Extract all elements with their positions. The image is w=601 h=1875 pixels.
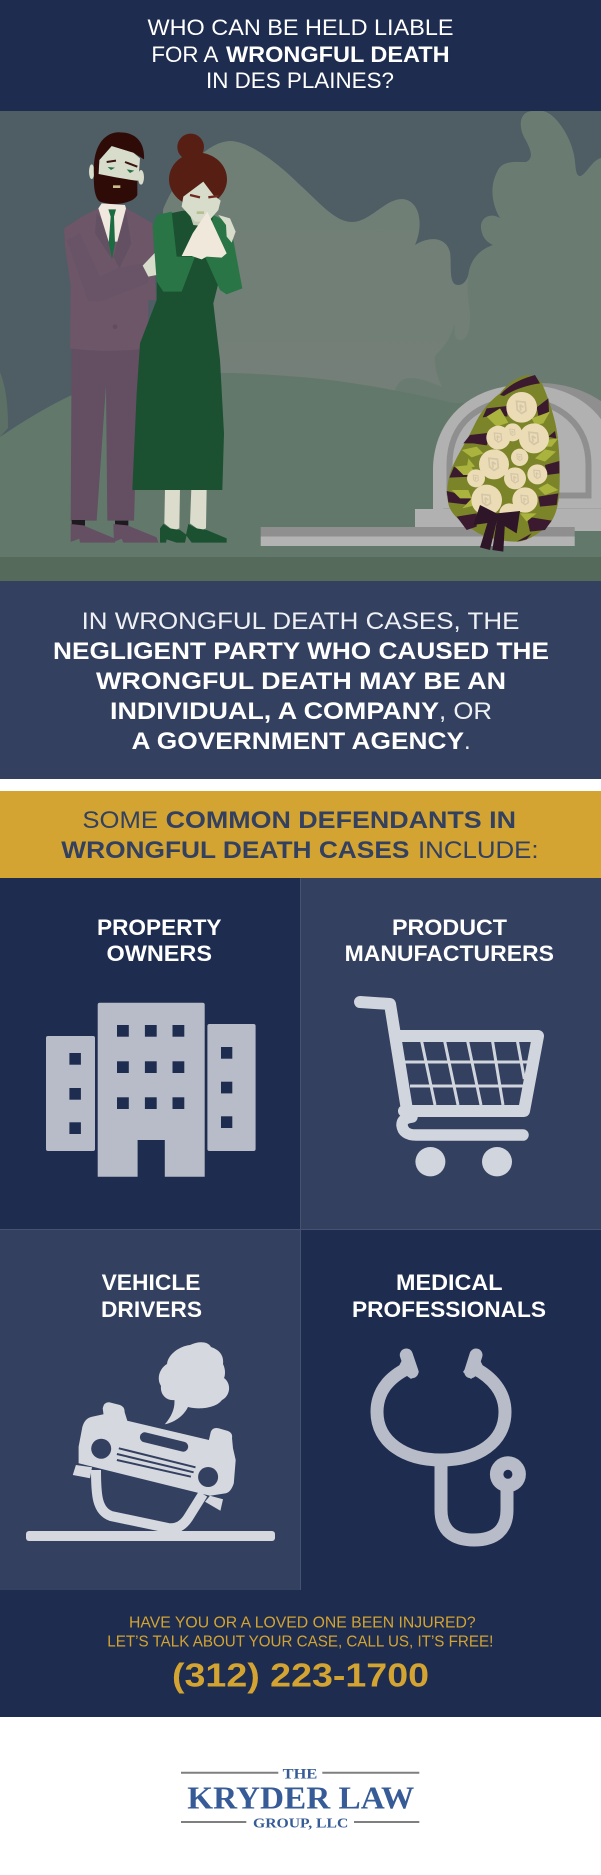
heading: property owners: PROPERTY [97, 915, 222, 940]
call to action footer [0, 1590, 601, 1717]
small bush at left [0, 372, 8, 437]
smoke puff [159, 1342, 229, 1424]
gold heading band [0, 791, 601, 878]
intro statement panel [0, 581, 601, 779]
panel: vehicle drivers [0, 1229, 300, 1590]
intro statement panel: NEGLIGENT PARTY WHO CAUSED THE [53, 638, 549, 665]
heading: medical professionals: PROFESSIONALS [352, 1297, 546, 1322]
wreath leaves [452, 408, 558, 522]
cell dividers [0, 878, 601, 1590]
intro statement panel: , OR [439, 698, 492, 725]
funeral wreath [447, 375, 560, 552]
gold heading band: COMMON DEFENDANTS IN [166, 807, 516, 834]
heading: medical professionals: MEDICAL [396, 1270, 502, 1295]
icon: stethoscope [377, 1352, 526, 1540]
heading: medical professionals [352, 1270, 546, 1322]
woman in green dress [132, 134, 242, 543]
panel: medical professionals [300, 1229, 601, 1590]
call to action footer: LET’S TALK ABOUT YOUR CASE, CALL US, IT’S FREE! [107, 1634, 493, 1651]
logo: The Kryder Law Group, LLC: THE [283, 1767, 317, 1783]
heading: vehicle drivers: DRIVERS [101, 1297, 202, 1322]
left tree [163, 141, 480, 420]
wreath ribbon bands [447, 375, 559, 542]
wreath bow [473, 505, 520, 552]
panel: property owners [0, 878, 300, 1229]
gold heading band: SOME [82, 807, 158, 834]
title banner: WRONGFUL DEATH [226, 42, 450, 67]
intro statement panel: . [464, 728, 471, 755]
intro statement panel: INDIVIDUAL, A COMPANY [110, 698, 439, 725]
heading: product manufacturers [345, 915, 554, 966]
heading: property owners: OWNERS [106, 941, 212, 966]
heading: product manufacturers: MANUFACTURERS [345, 941, 554, 966]
logo: The Kryder Law Group, LLC: KRYDER LAW [187, 1779, 414, 1815]
logo: The Kryder Law Group, LLC [181, 1767, 419, 1831]
heading: vehicle drivers: VEHICLE [102, 1270, 200, 1295]
heading: vehicle drivers [101, 1270, 202, 1322]
intro statement panel: IN WRONGFUL DEATH CASES, THE [82, 608, 519, 635]
right tree [395, 111, 601, 480]
icon: shopping cart [360, 1002, 538, 1176]
intro statement panel: A GOVERNMENT AGENCY [132, 728, 464, 755]
illustration: funeral scene [0, 111, 601, 581]
title banner: WHO CAN BE HELD LIABLE [148, 15, 454, 40]
panel: product manufacturers [300, 878, 601, 1229]
title banner: FOR A [151, 42, 219, 67]
icon: office buildings [46, 1003, 256, 1177]
call to action footer: HAVE YOU OR A LOVED ONE BEEN INJURED? [129, 1614, 476, 1631]
gold heading band: INCLUDE: [418, 837, 538, 864]
wreath roses [467, 392, 549, 523]
icon: overturned car with smoke [26, 1342, 275, 1541]
ground strip [0, 557, 601, 581]
logo: The Kryder Law Group, LLC: GROUP, LLC [253, 1816, 348, 1831]
gold heading band: WRONGFUL DEATH CASES [61, 837, 409, 864]
call to action footer: (312) 223-1700 [172, 1657, 429, 1694]
intro statement panel: WRONGFUL DEATH MAY BE AN [96, 668, 506, 695]
heading: property owners [97, 915, 222, 966]
title banner [0, 0, 601, 111]
man in suit [64, 132, 178, 543]
foreground hill [0, 373, 601, 581]
heading: product manufacturers: PRODUCT [392, 915, 508, 940]
gravestone [261, 383, 601, 546]
title banner: IN DES PLAINES? [206, 68, 394, 93]
